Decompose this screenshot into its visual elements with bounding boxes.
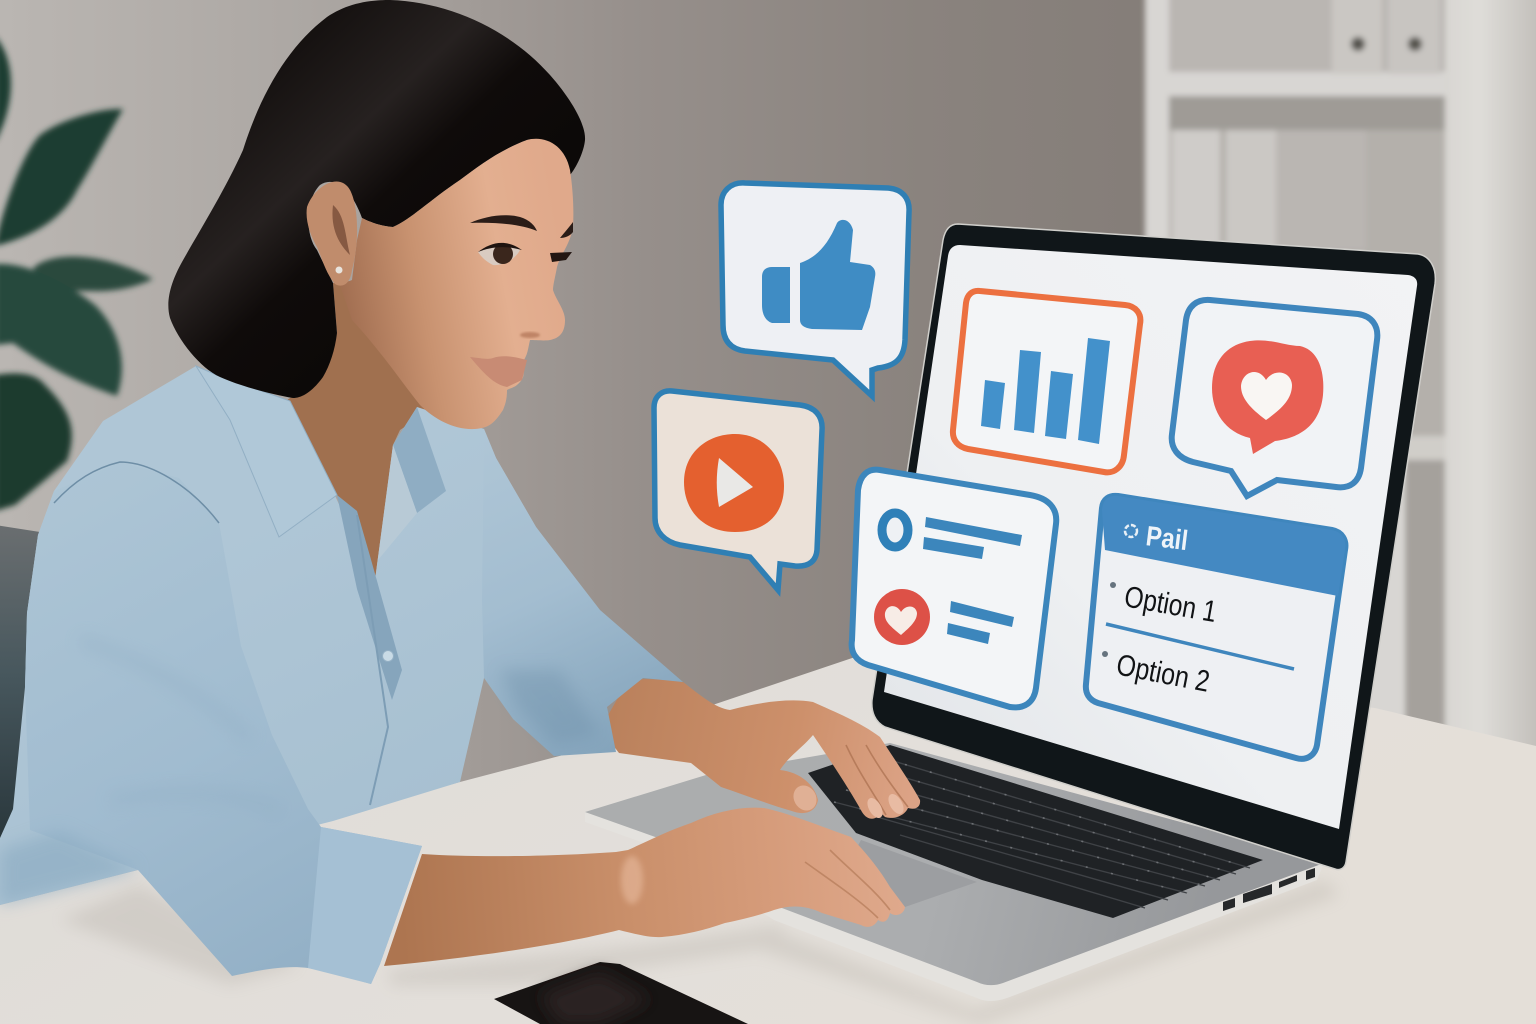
poll option 1: Option 1 <box>1122 580 1219 629</box>
keyboard <box>808 745 1263 918</box>
shoulder seam <box>54 462 219 523</box>
laptop base <box>585 743 1324 1001</box>
panel: bar chart card <box>953 291 1140 472</box>
inner shirt <box>375 445 417 580</box>
icon: play video bubble <box>654 391 822 590</box>
panel: heart bubble card <box>1172 300 1377 496</box>
upper forearm and hand <box>607 679 920 821</box>
shirt button <box>382 650 394 662</box>
poll icon <box>1125 525 1137 537</box>
far eyebrow <box>560 222 573 238</box>
panel: poll card <box>1086 496 1345 759</box>
poll title: Pail <box>1144 520 1190 556</box>
hair <box>168 0 585 398</box>
inner ear shadow <box>332 205 350 255</box>
placket line <box>357 515 388 805</box>
screen <box>884 245 1417 829</box>
far eye lashes <box>550 252 572 262</box>
ear <box>307 182 357 286</box>
collar shadow <box>337 495 402 700</box>
laptop <box>585 224 1435 1001</box>
laptop lid <box>872 224 1435 870</box>
shirt torso <box>0 366 683 984</box>
lips <box>470 356 527 387</box>
neck <box>287 280 430 580</box>
chair <box>0 525 40 860</box>
collar left <box>196 366 337 537</box>
near sleeve <box>25 462 422 984</box>
desk shadows <box>60 880 1340 1024</box>
option 1 bullet <box>1110 582 1116 588</box>
lower body shadow <box>0 830 138 905</box>
bookshelf <box>1145 0 1536 760</box>
face <box>340 139 573 429</box>
collar right <box>393 407 446 513</box>
trackpad <box>840 840 977 907</box>
cuff <box>308 827 422 984</box>
earring <box>336 266 342 274</box>
lower forearm and hand <box>384 808 905 966</box>
poll option 2: Option 2 <box>1114 648 1212 699</box>
eye <box>478 243 522 265</box>
nostril shadow <box>520 332 540 338</box>
far arm shadow <box>500 670 600 745</box>
phone <box>494 962 748 1024</box>
far arm sleeve <box>482 429 683 756</box>
desk <box>0 652 1536 1024</box>
eyebrow <box>470 215 537 231</box>
panel: profile list card <box>852 470 1056 707</box>
plant <box>0 36 153 511</box>
woman <box>0 0 920 984</box>
option 2 bullet <box>1102 651 1108 657</box>
side ports <box>1223 868 1315 911</box>
sleeve folds <box>80 640 280 810</box>
icon: thumbs up bubble <box>721 183 909 396</box>
